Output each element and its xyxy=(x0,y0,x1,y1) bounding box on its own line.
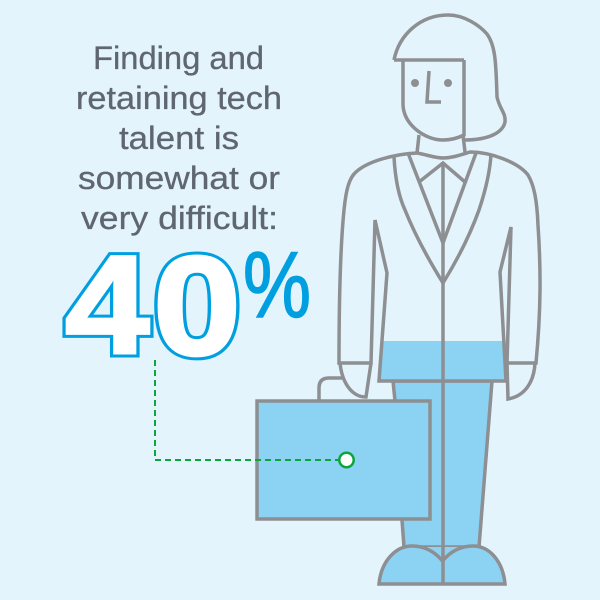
heading: finding and retaining tech talent: Finding and xyxy=(93,40,264,76)
icon: eyes xyxy=(411,79,452,87)
figure: person in suit xyxy=(339,15,540,584)
gap fill between shoes xyxy=(412,547,473,563)
heading: finding and retaining tech talent: very difficult: xyxy=(81,200,278,236)
left hand xyxy=(340,363,371,397)
right hand xyxy=(507,363,535,399)
neck xyxy=(417,135,465,153)
heading: finding and retaining tech talent: retaining tech xyxy=(76,80,282,116)
face xyxy=(403,60,464,140)
trousers xyxy=(393,381,492,547)
centre line xyxy=(441,163,445,584)
heading: finding and retaining tech talent xyxy=(76,40,282,236)
statistic: 40 percent: 0 xyxy=(153,226,241,384)
statistic: 40 percent xyxy=(65,226,311,384)
hair xyxy=(394,15,505,140)
statistic: 40 percent: 4 xyxy=(65,226,150,383)
jacket hem fill xyxy=(379,341,506,381)
lapels xyxy=(394,153,491,283)
jacket outline xyxy=(339,152,540,381)
statistic: 40 percent: 4 xyxy=(65,226,150,383)
briefcase xyxy=(257,378,430,519)
statistic: 40 percent: 0 xyxy=(153,226,241,384)
connector: dashed green line xyxy=(155,360,340,460)
nose xyxy=(427,71,441,102)
shoes xyxy=(379,546,505,584)
heading: finding and retaining tech talent: somewhat or xyxy=(78,160,280,196)
shirt collar xyxy=(419,163,465,182)
heading: finding and retaining tech talent: talent is xyxy=(119,120,239,156)
statistic: 40 percent: % xyxy=(243,232,311,337)
connector dot xyxy=(339,453,354,467)
